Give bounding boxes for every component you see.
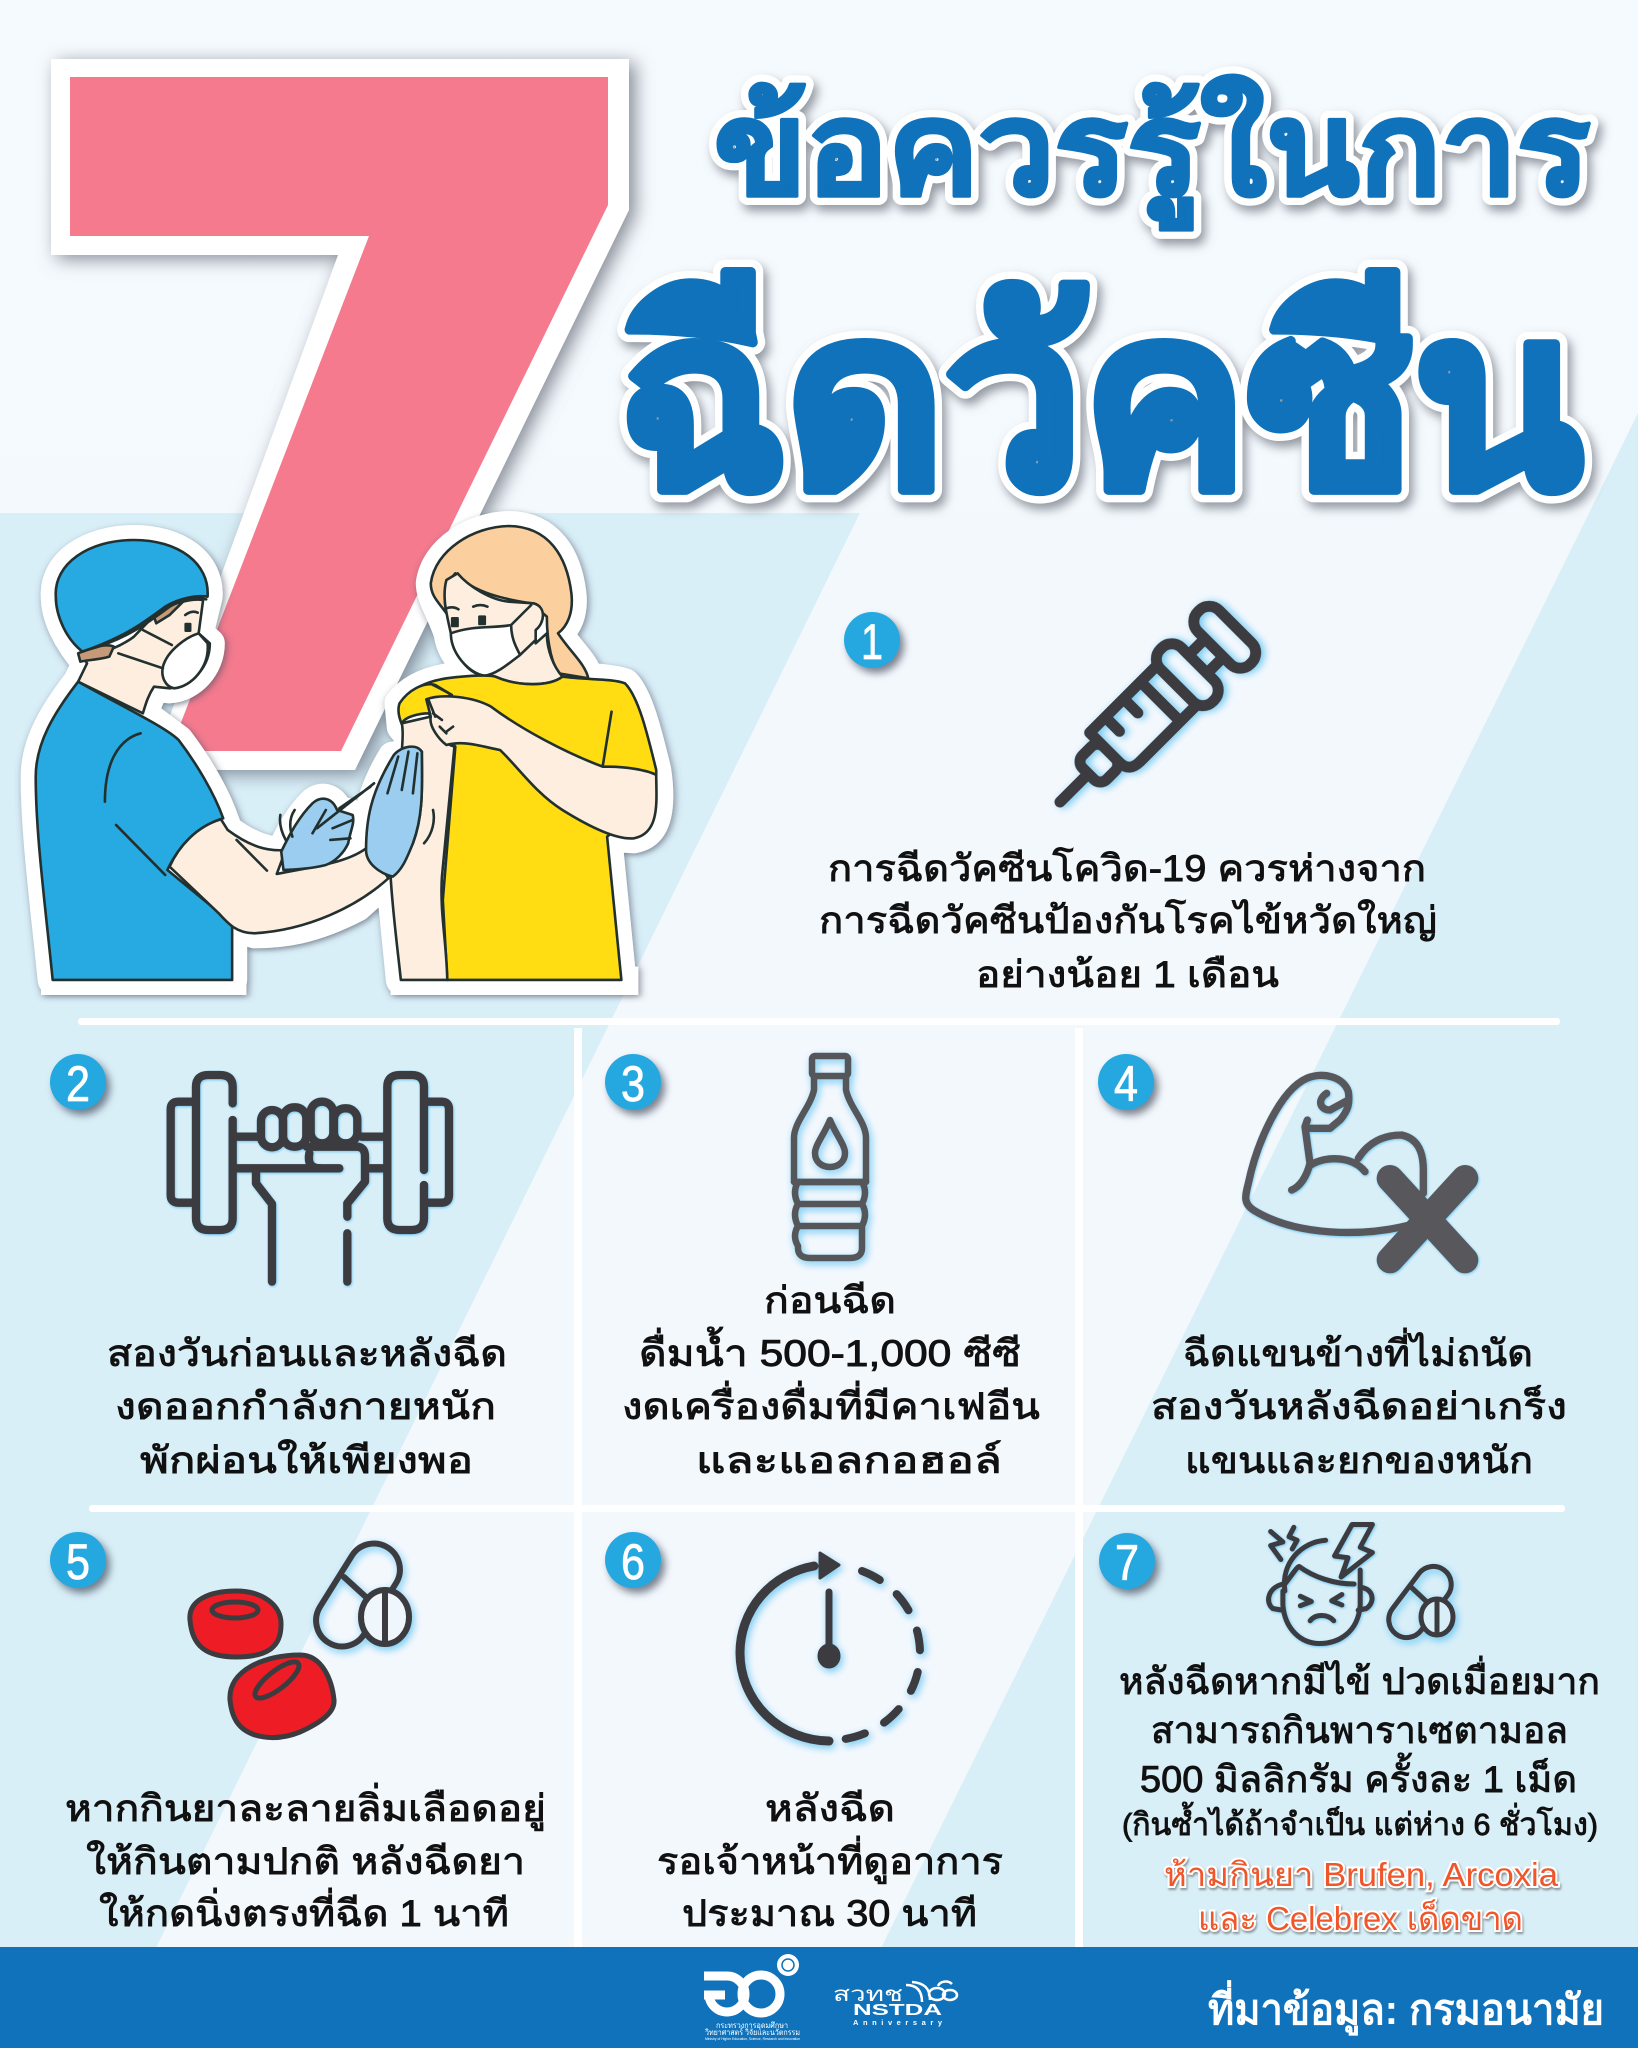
icon: flexed arm crossed out xyxy=(1246,1075,1465,1260)
text 5: ให้กินตามปกติ หลังฉีดยา xyxy=(86,1840,525,1882)
panel: item 1 xyxy=(819,600,1437,995)
text 7: (กินซ้ำได้ถ้าจำเป็น แต่ห่าง 6 ชั่วโมง) xyxy=(1122,1802,1598,1842)
text 7 xyxy=(1119,1655,1600,1842)
badge 5: 5 xyxy=(66,1534,90,1590)
divider lines xyxy=(78,1018,1565,1948)
footer bar xyxy=(0,1947,1638,2048)
title line 1: ข้อควรรู้ในการ xyxy=(714,75,1590,231)
text 5: หากกินยาละลายลิ่มเลือดอยู่ xyxy=(65,1782,546,1831)
badge 5 xyxy=(50,1532,106,1590)
text 2: งดออกกำลังกายหนัก xyxy=(115,1386,496,1427)
badge 6 xyxy=(605,1532,661,1590)
text 1: การฉีดวัคซีนโควิด-19 ควรห่างจาก xyxy=(828,847,1426,889)
title line 2: ฉีดวัคซีน xyxy=(618,261,1582,539)
text 1: อย่างน้อย 1 เดือน xyxy=(976,954,1279,995)
badge 7 xyxy=(1099,1533,1155,1591)
logo: ministry: วิทยาศาสตร์ วิจัยและนวัตกรรม xyxy=(705,2027,800,2037)
doctor cap xyxy=(56,540,208,652)
doctor neck and face xyxy=(78,600,210,713)
badge 2 xyxy=(50,1054,106,1112)
text 4: แขนและยกของหนัก xyxy=(1185,1440,1533,1481)
warning text: ห้ามกินยา Brufen, Arcoxia xyxy=(1164,1856,1559,1893)
logo: ministry: Ministry of Higher Education, Science, Research and Innovation xyxy=(705,2036,800,2041)
doctor mask xyxy=(118,630,208,688)
badge 1 xyxy=(844,612,900,670)
text 3: งดเครื่องดื่มที่มีคาเฟอีน xyxy=(622,1380,1040,1427)
text 3 xyxy=(622,1280,1040,1481)
logo: ministry: กระทรวงการอุดมศึกษา xyxy=(716,2021,788,2030)
text 7: 500 มิลลิกรัม ครั้งละ 1 เม็ด xyxy=(1140,1752,1577,1800)
patient hair xyxy=(431,526,588,678)
icon: capsule and pill xyxy=(306,1534,410,1656)
doctor body xyxy=(36,682,232,980)
patient shirt xyxy=(420,676,656,980)
icon: syringe xyxy=(1034,600,1262,828)
text 3: ก่อนฉีด xyxy=(764,1280,896,1321)
icon: water bottle xyxy=(794,1056,866,1258)
text 7: สามารถกินพาราเซตามอล xyxy=(1151,1710,1568,1751)
patient upper arm xyxy=(391,717,454,980)
icon: headache face xyxy=(1269,1524,1372,1644)
big number 7 xyxy=(51,59,629,770)
warning text xyxy=(1164,1856,1559,1937)
text 2 xyxy=(107,1333,507,1481)
badge 4: 4 xyxy=(1114,1056,1138,1112)
illustration: doctor vaccinating patient xyxy=(36,526,658,995)
patient forearm and hand xyxy=(426,696,656,838)
badge 1: 1 xyxy=(861,614,883,670)
text 2: สองวันก่อนและหลังฉีด xyxy=(107,1333,507,1374)
patient face xyxy=(445,573,562,684)
text 1 xyxy=(819,847,1437,995)
logo: NSTDA: NSTDA xyxy=(853,2002,943,2019)
text 6 xyxy=(657,1788,1003,1934)
badge 2: 2 xyxy=(66,1056,90,1112)
text 6: รอเจ้าหน้าที่ดูอาการ xyxy=(657,1835,1003,1884)
title line 2: ฉีดวัคซีน xyxy=(618,261,1582,539)
text 3: และแอลกอฮอล์ xyxy=(696,1440,1002,1481)
doctor arm xyxy=(170,819,388,933)
panel: item 6 xyxy=(605,1532,1003,1934)
syringe in hand xyxy=(317,783,374,828)
sticker outline xyxy=(36,526,658,995)
text 7: หลังฉีดหากมีไข้ ปวดเมื่อยมาก xyxy=(1119,1655,1600,1702)
title xyxy=(618,75,1590,539)
text 1: การฉีดวัคซีนป้องกันโรคไข้หวัดใหญ่ xyxy=(819,899,1437,942)
large glove xyxy=(366,747,422,877)
text 5 xyxy=(65,1782,546,1934)
icon: timer xyxy=(740,1553,920,1741)
text 6: ประมาณ 30 นาที xyxy=(682,1893,977,1934)
figures xyxy=(36,526,656,980)
text 4 xyxy=(1151,1327,1567,1481)
text 2: พักผ่อนให้เพียงพอ xyxy=(140,1439,473,1481)
text 6: หลังฉีด xyxy=(765,1788,895,1829)
rolled sleeve xyxy=(398,684,452,724)
panel: item 5 xyxy=(50,1532,546,1934)
badge 6: 6 xyxy=(621,1534,645,1590)
panel: item 3 xyxy=(605,1054,1040,1481)
badge 3 xyxy=(605,1054,661,1112)
text 5: ให้กดนิ่งตรงที่ฉีด 1 นาที xyxy=(99,1887,509,1934)
text 3: ดื่มน้ำ 500-1,000 ซีซี xyxy=(639,1326,1021,1374)
badge 3: 3 xyxy=(621,1056,645,1112)
panel: item 7 xyxy=(1099,1524,1600,1937)
icon: red tablets xyxy=(190,1591,334,1738)
logo: NSTDA xyxy=(833,1982,957,2027)
text 4: สองวันหลังฉีดอย่าเกร็ง xyxy=(1151,1383,1567,1427)
panel: item 4 xyxy=(1098,1054,1567,1481)
text 4: ฉีดแขนข้างที่ไม่ถนัด xyxy=(1183,1327,1533,1374)
icon: dumbbell in fist xyxy=(171,1075,449,1282)
patient mask xyxy=(451,605,536,676)
logo: NSTDA: สวทช xyxy=(833,1984,903,2006)
small gloved hand xyxy=(281,799,353,870)
warning text: และ Celebrex เด็ดขาด xyxy=(1198,1899,1523,1937)
logo: ministry xyxy=(704,1954,800,2041)
title line 1: ข้อควรรู้ในการ xyxy=(714,75,1590,231)
badge 7: 7 xyxy=(1115,1535,1139,1591)
panel: item 2 xyxy=(50,1054,507,1481)
logo: NSTDA: Anniversary xyxy=(853,2018,943,2027)
badge 4 xyxy=(1098,1054,1154,1112)
source text: ที่มาข้อมูล: กรมอนามัย xyxy=(1208,1980,1604,2036)
icon: capsule and pill small xyxy=(1382,1559,1458,1645)
